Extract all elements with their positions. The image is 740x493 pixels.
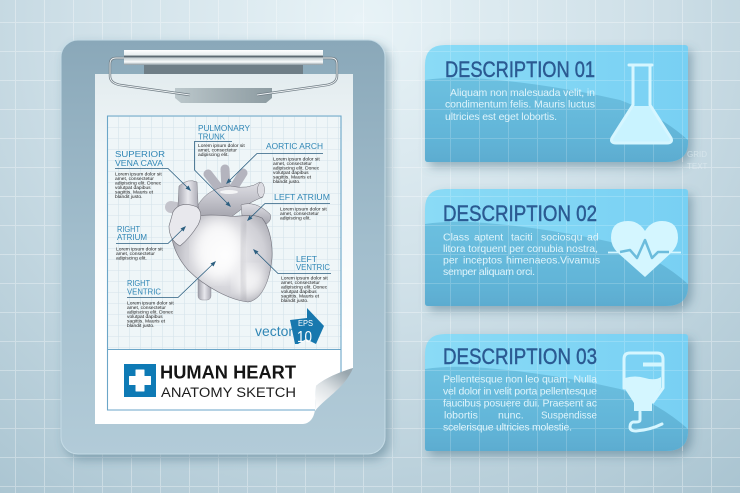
label: aortic arch: Lorem ipsum dolor sit [273,156,320,162]
label: pulmonary trunk: Lorem ipsum dolor sit [198,143,245,149]
label: left ventric: adipiscing elit. Donec [281,284,328,290]
label: pulmonary trunk: amet, consectetur [198,148,237,154]
label: aortic arch: adipiscing elit. Donec [273,166,320,172]
body text: nunc. [498,410,524,422]
clipboard board [61,40,385,454]
label: right atrium: adipiscing elit. [116,256,147,262]
label: superior vena cava: SUPERIOR [115,150,165,159]
card background [425,334,688,451]
faint grid text [687,150,708,171]
label: superior vena cava: volutpat dapibus [115,185,151,191]
card background [425,45,688,162]
label: right atrium: RIGHT [117,225,140,234]
body text: Suspendisse [541,410,597,422]
label: pulmonary trunk: PULMONARY [198,124,251,133]
label: right atrium: ATRIUM [117,233,147,242]
body text: aptent [474,232,503,244]
icon: IV bag [624,353,663,431]
body text [445,87,595,123]
label: right ventric: volutpat dapibus [127,314,163,320]
label: superior vena cava: Lorem ipsum dolor sit [115,172,162,178]
label: aortic arch: AORTIC ARCH [266,142,323,151]
label: pulmonary trunk: TRUNK [198,132,226,142]
label: pulmonary trunk: adipiscing elit. [198,152,229,158]
label: left atrium: Lorem ipsum dolor sit [280,206,327,212]
body text: inceptos [463,254,502,266]
clip wire [110,58,337,95]
body text: vel dolor in velit porta pellentesque [443,386,597,398]
body text: ultricies est eget lobortis. [445,111,557,123]
label: right ventric [127,261,216,329]
title: human heart: HUMAN HEART [160,362,296,382]
body text: Aliquam non malesuada velit, in [450,87,595,99]
body text: ad [587,232,599,244]
label: left ventric: sagittis. Mauris et [281,294,320,300]
body text: litora torquent per conubia nostra, [443,243,598,255]
clip back plate [144,64,303,74]
label: right ventric: blandit justo. [127,323,154,329]
label: right atrium: Lorem ipsum dolor sit [116,246,163,252]
body text [443,232,600,278]
card background [425,189,688,306]
label: aortic arch: volutpat dapibus [273,170,309,176]
icon: medical cross logo [124,364,156,397]
label: left atrium: LEFT ATRIUM [274,193,330,202]
panel: description 02 [425,189,688,306]
body text: semper aliquam orci. [443,266,535,278]
vector EPS badge [255,308,324,346]
faint grid text: TEXT [687,162,708,171]
label: left ventric: Lorem ipsum dolor sit [281,276,328,282]
label: aortic arch [226,142,323,185]
label: aortic arch: blandit justo. [273,179,300,185]
label: right ventric: sagittis. Mauris et [127,318,166,324]
panel: clipboard [61,40,385,454]
sketch frame [108,116,341,410]
label: aortic arch: amet, consectetur [273,161,312,167]
label: left ventric: VENTRIC [296,263,330,272]
paper curl [315,368,353,411]
vector EPS badge: vector [255,323,293,339]
panel: description 03 [425,334,688,451]
heading: DESCRIPTION 01 [445,57,595,82]
label: left ventric: volutpat dapibus [281,289,317,295]
vector EPS badge: EPS [298,319,313,328]
label: pulmonary trunk [194,124,251,207]
body text: lobortis [444,410,478,422]
icon: flask [611,65,672,143]
body text: himenaeos. [506,254,560,266]
clip lower plate [175,88,272,103]
body text: taciti [511,232,533,244]
paper sheet [95,74,353,424]
label: right atrium: amet, consectetur [116,251,155,257]
label: superior vena cava [115,150,191,200]
body text: condimentum felis. Mauris luctus [445,98,595,110]
heading: DESCRIPTION 02 [443,201,597,226]
clip bar [124,50,323,65]
body text: Class [443,232,469,244]
label: left ventric: amet, consectetur [281,280,320,286]
body text: scelerisque ultricies molestie. [443,422,572,434]
vector EPS badge: 10 [297,329,312,346]
label: right ventric: amet, consectetur [127,305,166,311]
label: left ventric [253,249,331,304]
label: superior vena cava: amet, consectetur [115,176,154,182]
heading: DESCRIPTION 03 [443,344,597,369]
label: right ventric: Lorem ipsum dolor sit [127,300,174,306]
body text: faucibus posuere dui. Praesent ac [443,398,597,410]
label: left atrium: adipiscing elit. [280,216,311,222]
label: left atrium [247,193,330,222]
panel: description 01 [425,45,708,171]
label: left ventric: LEFT [296,255,317,264]
label: left atrium: amet, consectetur [280,211,319,217]
label: superior vena cava: VENA CAVA [115,159,164,168]
label: superior vena cava: sagittis. Mauris et [115,190,154,196]
faint grid text: GRID [687,150,707,159]
icon: heart with pulse [608,221,681,277]
label: left ventric: blandit justo. [281,298,308,304]
body text [443,374,597,434]
body text: per [443,254,459,266]
label: superior vena cava: blandit justo. [115,194,142,200]
body text: Pellentesque non leo quam. Nulla [443,374,597,386]
label: right ventric: RIGHT [127,279,150,288]
label: superior vena cava: adipiscing elit. Donec [115,180,162,186]
subtitle: anatomy sketch: ANATOMY SKETCH [161,385,296,400]
label: right ventric: adipiscing elit. Donec [127,310,174,316]
label: right atrium [116,225,186,262]
body text: sociosqu [541,232,583,244]
label: aortic arch: sagittis. Mauris et [273,174,312,180]
label: right ventric: VENTRIC [127,288,161,296]
heart illustration [169,169,272,302]
body text: Vivamus [560,254,600,266]
